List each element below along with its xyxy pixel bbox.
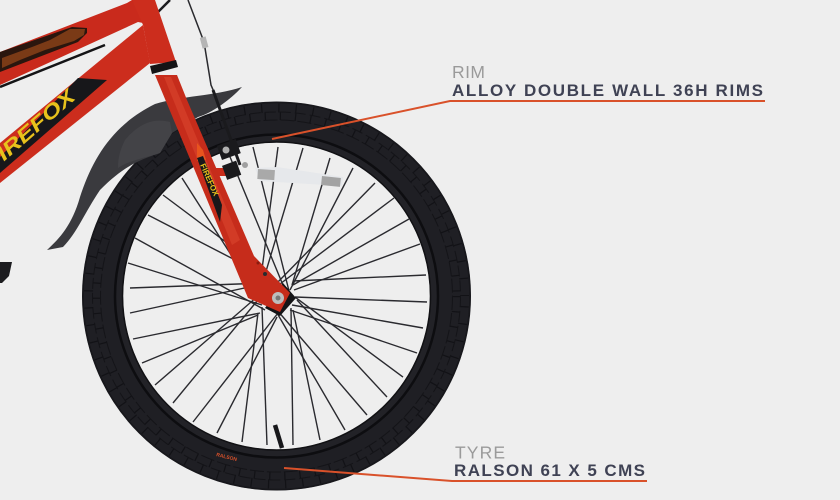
fork orange badge	[197, 143, 206, 161]
callout label: rim: RIM	[452, 62, 485, 82]
upper brake cable	[188, 0, 214, 92]
down tube decal	[0, 78, 107, 173]
valve	[275, 425, 282, 448]
hub	[265, 283, 296, 316]
brake bridge stub	[216, 168, 230, 176]
fork brand text: FIREFOX	[198, 162, 221, 198]
callout leader: rim	[272, 101, 765, 139]
callout value: rim: ALLOY DOUBLE WALL 36H RIMS	[452, 81, 763, 100]
head tube	[132, 0, 176, 64]
wheel rim	[115, 134, 438, 458]
callout leader: tyre	[284, 468, 647, 481]
frame down tube	[0, 25, 150, 183]
wheel spokes	[128, 147, 427, 445]
front mudguard	[47, 87, 242, 250]
second cable	[158, 0, 170, 12]
callout value: tyre: RALSON 61 X 5 CMS	[454, 461, 645, 480]
wheel tyre	[83, 102, 470, 490]
mudguard highlight	[118, 121, 172, 168]
frame top tube	[0, 0, 155, 85]
pedal	[0, 262, 12, 283]
reflector	[255, 167, 343, 187]
frame cable under top tube	[0, 45, 105, 87]
brake mount	[217, 139, 248, 180]
cable ferrule	[200, 36, 208, 49]
callout label: tyre: TYRE	[455, 442, 505, 462]
tyre sidewall label: RALSON	[216, 452, 238, 463]
fork blade	[155, 75, 290, 312]
brake arm	[213, 90, 240, 165]
fork decal	[197, 156, 222, 222]
top tube decal	[0, 27, 87, 72]
headset collar	[150, 60, 178, 74]
fork highlight	[164, 77, 240, 245]
axle nut	[256, 262, 284, 304]
